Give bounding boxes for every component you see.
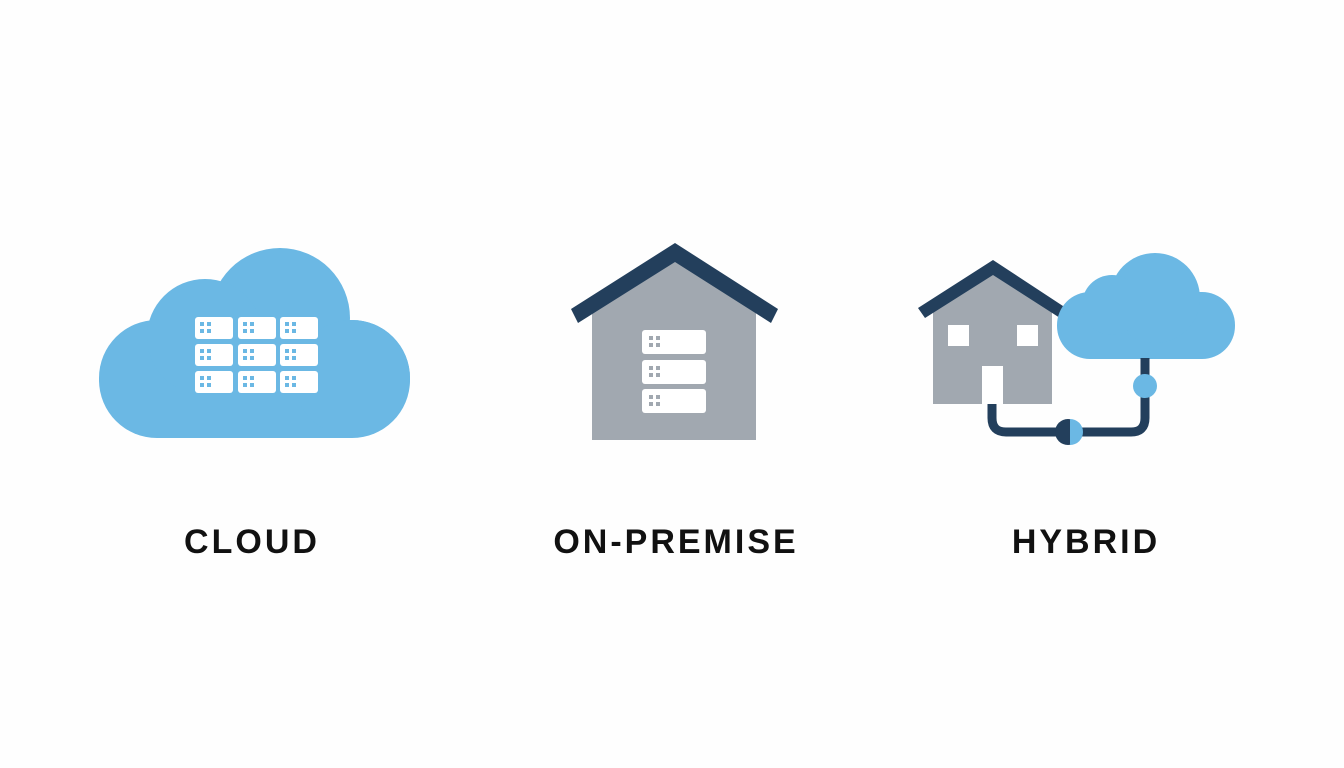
cable (992, 358, 1145, 432)
cloud (1057, 253, 1235, 359)
label: cloud: CLOUD (184, 523, 320, 561)
label: hybrid: HYBRID (1012, 523, 1160, 561)
server grid (195, 317, 318, 393)
server stack (642, 330, 706, 413)
icon: hybrid house connected to cloud (918, 253, 1235, 445)
icon: on-premise house with servers (571, 243, 778, 440)
icon: cloud with servers (99, 248, 410, 438)
label: on-premise: ON-PREMISE (553, 523, 799, 561)
